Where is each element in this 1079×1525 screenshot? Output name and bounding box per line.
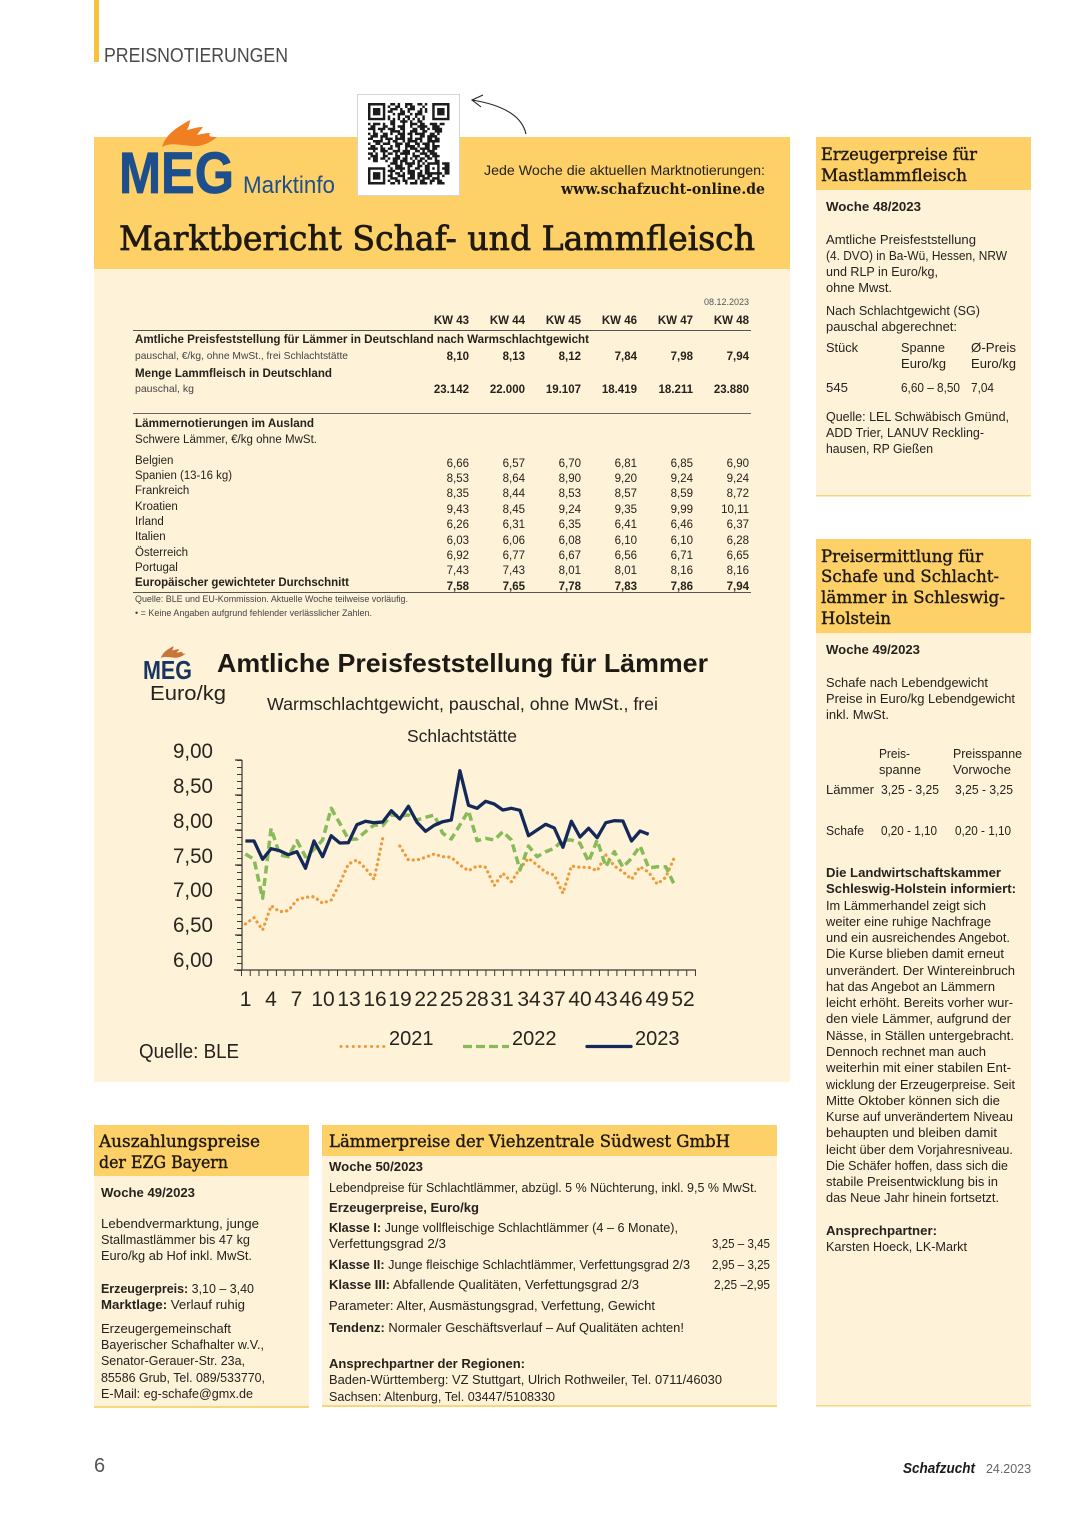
axes (234, 760, 697, 973)
table rows abroad: Kroatien (135, 501, 178, 513)
table rows abroad: 6,67 (559, 550, 581, 562)
table rows Germany: 8,12 (559, 351, 581, 363)
heading: Holstein (821, 609, 891, 629)
price table: 3,25 - 3,25 (881, 783, 939, 797)
table rows Germany: 18.211 (658, 384, 694, 396)
x axis labels: 49 (645, 988, 669, 1011)
table rows Germany: 23.142 (434, 384, 469, 396)
table header weeks: KW 46 (602, 315, 637, 327)
table rows abroad: 7,86 (671, 581, 693, 593)
table rows abroad (135, 418, 750, 593)
table rows abroad: 6,26 (447, 519, 469, 531)
x axis labels: 46 (619, 988, 643, 1011)
x axis labels: 40 (568, 988, 592, 1011)
article text: Karsten Hoeck, LK-Markt (826, 1240, 967, 1254)
table rows abroad: 8,59 (671, 488, 693, 500)
article text: Kurse auf unverändertem Niveau (826, 1110, 1013, 1124)
table rows abroad: Frankreich (135, 485, 189, 497)
body text: pauschal abgerechnet: (826, 320, 957, 334)
body text: Woche 49/2023 (101, 1186, 195, 1200)
table source note: • = Keine Angaben aufgrund fehlender verlässlicher Zahlen. (135, 608, 372, 618)
chart: official lamb prices (139, 646, 708, 1063)
heading: Lämmerpreise der Viehzentrale Südwest GmbH (329, 1132, 730, 1152)
table rows abroad: 7,43 (447, 565, 469, 577)
body text: Woche 50/2023 (329, 1160, 423, 1174)
table rows abroad: 6,06 (503, 535, 525, 547)
table rows abroad: 9,24 (559, 504, 582, 516)
body text: Sachsen: Altenburg, Tel. 03447/5108330 (329, 1390, 555, 1404)
table rows abroad: 9,20 (615, 473, 637, 485)
table rows abroad: 6,66 (447, 458, 469, 470)
article text: den viele Lämmer, aufgrund der (826, 1012, 1011, 1026)
y axis labels: 8,00 (173, 809, 213, 833)
table rows Germany: Amtliche Preisfeststellung für Lämmer in Deutschland nach Warmschlachtgewicht (135, 334, 589, 346)
article text: behaupten und bleiben damit (826, 1126, 998, 1140)
table source note: Quelle: BLE und EU-Kommission. Aktuelle Woche teilweise vorläufig. (135, 594, 408, 604)
body text: 6,60 – 8,50 (901, 381, 960, 395)
table header weeks: KW 43 (434, 315, 469, 327)
body text: ADD Trier, LANUV Reckling- (826, 426, 984, 440)
table header weeks: KW 48 (714, 315, 750, 327)
article text: leicht erhöht. Bereits vorher wur- (826, 996, 1013, 1010)
body text: 7,04 (971, 381, 994, 395)
table rows abroad: 8,35 (447, 488, 469, 500)
table rows abroad: Italien (135, 531, 166, 543)
table rows abroad: 6,10 (671, 535, 693, 547)
table rows abroad: 6,92 (447, 550, 469, 562)
x axis labels: 52 (671, 988, 695, 1011)
table rows abroad: 7,43 (503, 565, 525, 577)
table rows abroad: 8,90 (559, 473, 581, 485)
body text: Spanne (901, 341, 945, 355)
section heading: Preisnotierungen: PREISNOTIERUNGEN (104, 45, 288, 67)
price table: Lämmer (826, 783, 874, 797)
table rows abroad: 10,11 (721, 504, 749, 516)
x axis labels: 43 (594, 988, 618, 1011)
price table: Schafe (826, 824, 864, 838)
table rows abroad: 8,16 (727, 565, 749, 577)
body text: 545 (826, 381, 848, 395)
panel: Lämmerpreise Viehzentrale Südwest (322, 1125, 777, 1407)
heading: der EZG Bayern (99, 1153, 228, 1173)
chart subtitle: Schlachtstätte (407, 726, 517, 746)
footer: magazine name and issue (903, 1460, 1031, 1477)
table rows Germany: 18.419 (602, 384, 637, 396)
table rows abroad: 9,24 (727, 473, 750, 485)
article text: und ein ausreichendes Angebot. (826, 931, 1010, 945)
legend: 2022 (512, 1028, 556, 1050)
legend: 2023 (635, 1028, 680, 1050)
x axis labels: 31 (490, 988, 514, 1011)
price table: Preise in Euro/kg Lebendgewicht (826, 692, 1016, 706)
body text: Parameter: Alter, Ausmästungsgrad, Verfettung, Gewicht (329, 1299, 656, 1313)
y axis unit: Euro/kg (150, 683, 226, 705)
x axis labels: 1 (240, 988, 251, 1011)
table rows abroad: Spanien (13-16 kg) (135, 470, 232, 482)
table rows Germany: pauschal, kg (135, 383, 194, 395)
article text: Im Lämmerhandel zeigt sich (826, 899, 986, 913)
body text: ohne Mwst. (826, 281, 892, 295)
table rows abroad: 7,65 (503, 581, 526, 593)
y axis labels: 6,00 (173, 948, 213, 972)
y axis labels (173, 739, 213, 972)
table rows Germany: 22.000 (490, 384, 525, 396)
y axis labels: 6,50 (173, 913, 213, 937)
heading: Erzeugerpreise für (821, 145, 978, 165)
article text: Ansprechpartner: (826, 1224, 937, 1238)
body text: Amtliche Preisfeststellung (826, 233, 976, 247)
table rows abroad: 8,45 (503, 504, 525, 516)
body text: Quelle: LEL Schwäbisch Gmünd, (826, 410, 1009, 424)
body text: hausen, RP Gießen (826, 442, 933, 456)
body text: Ansprechpartner der Regionen: (329, 1357, 525, 1371)
price table: 3,25 - 3,25 (955, 783, 1013, 797)
panel: Auszahlungspreise EZG Bayern (94, 1125, 309, 1408)
heading (821, 547, 1005, 629)
price table: 0,20 - 1,10 (881, 824, 937, 838)
body text: Euro/kg (901, 357, 946, 371)
heading: Schafe und Schlacht- (821, 567, 999, 587)
body text (101, 1186, 265, 1401)
table rows abroad: 9,35 (615, 504, 637, 516)
panel: market report (94, 94, 790, 1082)
table rows abroad: 6,70 (559, 458, 581, 470)
body text (329, 1160, 770, 1404)
body text: Erzeugerpreise, Euro/kg (329, 1201, 479, 1215)
table rows abroad: 8,01 (615, 565, 637, 577)
article text: stabile Preisentwicklung bis in (826, 1175, 998, 1189)
body text: und RLP in Euro/kg, (826, 265, 938, 279)
body text: Ø-Preis (971, 341, 1016, 355)
article text: Schleswig-Holstein informiert: (826, 882, 1016, 896)
table rows abroad: 8,64 (503, 473, 526, 485)
logo: MEG Marktinfo (119, 120, 335, 206)
chart title: Amtliche Preisfeststellung für Lämmer (217, 648, 708, 678)
table rows abroad: Europäischer gewichteter Durchschnitt (135, 577, 349, 589)
x axis labels: 25 (440, 988, 463, 1011)
table rows abroad: 9,99 (671, 504, 693, 516)
article text: Die Kurse blieben damit erneut (826, 947, 1005, 961)
table rows abroad: Portugal (135, 562, 178, 574)
body text: Stallmastlämmer bis 47 kg (101, 1233, 250, 1247)
article text: weiter eine ruhige Nachfrage (825, 915, 991, 929)
article text: leicht über dem Vorjahresniveau. (826, 1143, 1013, 1157)
heading (98, 1132, 260, 1173)
body text: Bayerischer Schafhalter w.V., (101, 1338, 264, 1352)
body text: Tendenz: Normaler Geschäftsverlauf – Auf Qualitäten achten! (329, 1321, 684, 1335)
body text: Baden-Württemberg: VZ Stuttgart, Ulrich Rothweiler, Tel. 0711/46030 (329, 1373, 722, 1387)
legend: 2021 (389, 1028, 434, 1050)
body text: 2,25 –2,95 (714, 1278, 770, 1292)
footer: magazine name and issue: 24.2023 (986, 1461, 1031, 1476)
x axis labels: 34 (517, 988, 541, 1011)
table rows abroad: 6,35 (559, 519, 581, 531)
heading: Mastlammfleisch (821, 166, 967, 186)
body text: E-Mail: eg-schafe@gmx.de (101, 1387, 253, 1401)
table: prices: 08.12.2023 (704, 297, 749, 307)
table rows abroad: 7,94 (727, 581, 750, 593)
x axis labels (240, 988, 695, 1011)
line 2022 (245, 808, 674, 898)
x axis labels: 4 (265, 988, 277, 1011)
article text: unverändert. Der Wintereinbruch (826, 964, 1015, 978)
table rows abroad: 8,53 (447, 473, 469, 485)
x axis labels: 10 (311, 988, 335, 1011)
table rows abroad: Österreich (135, 547, 188, 559)
table rows abroad: 6,65 (727, 550, 749, 562)
table rows abroad: 7,83 (615, 581, 637, 593)
price table: Schafe nach Lebendgewicht (826, 676, 989, 690)
price table (826, 643, 1022, 838)
table rows abroad: 8,44 (503, 488, 526, 500)
article text: wicklung der Erzeugerpreise. Seit (825, 1078, 1015, 1092)
article text: Nässe, in Ställen untergebracht. (826, 1029, 1014, 1043)
article text: das Neue Jahr hinein fortsetzt. (826, 1191, 999, 1205)
table rows Germany: 19.107 (546, 384, 581, 396)
table rows abroad: 7,78 (559, 581, 582, 593)
body text: Klasse III: Abfallende Qualitäten, Verfettungsgrad 2/3 (329, 1278, 639, 1292)
body text: Stück (826, 341, 859, 355)
table rows Germany: 23.880 (714, 384, 749, 396)
icon: small MEG logo: MEG (143, 655, 192, 685)
line 2021 (245, 838, 674, 930)
table header weeks: KW 45 (546, 315, 582, 327)
y axis labels: 8,50 (173, 774, 213, 798)
section heading: Preisnotierungen (94, 0, 288, 67)
table rows abroad: 6,77 (503, 550, 525, 562)
table rows abroad: 6,31 (503, 519, 525, 531)
y axis labels: 7,00 (173, 878, 213, 902)
table rows Germany: 8,10 (447, 351, 469, 363)
x axis labels: 37 (542, 988, 566, 1011)
table rows abroad: 8,72 (727, 488, 749, 500)
table rows Germany: 8,13 (503, 351, 525, 363)
text: weekly notice (484, 162, 765, 198)
table rows abroad: 6,57 (503, 458, 525, 470)
body text: 3,25 – 3,45 (712, 1237, 770, 1251)
chart subtitle: Warmschlachtgewicht, pauschal, ohne MwSt., frei (267, 694, 658, 714)
logo: MEG Marktinfo: Marktinfo (243, 172, 335, 199)
table rows Germany: Menge Lammfleisch in Deutschland (135, 368, 332, 380)
x axis labels: 16 (363, 988, 387, 1011)
table rows abroad: 6,37 (727, 519, 749, 531)
body text: 85586 Grub, Tel. 089/533770, (101, 1371, 265, 1385)
body text: Euro/kg (971, 357, 1016, 371)
table rows Germany (135, 334, 750, 396)
body text: Verfettungsgrad 2/3 (329, 1237, 446, 1251)
y axis labels: 9,00 (173, 739, 213, 763)
body text: Senator-Gerauer-Str. 23a, (101, 1354, 245, 1368)
table header weeks: KW 47 (658, 315, 693, 327)
body text: Erzeugergemeinschaft (101, 1322, 232, 1336)
body text: Klasse I: Junge vollfleischige Schlachtlämmer (4 – 6 Monate), (329, 1221, 678, 1235)
article text: Die Schäfer hoffen, dass sich die (826, 1159, 1008, 1173)
table rows abroad: 6,56 (615, 550, 637, 562)
price table: Preis- (879, 747, 910, 761)
table rows abroad: Schwere Lämmer, €/kg ohne MwSt. (135, 434, 317, 446)
table rows abroad: 6,10 (615, 535, 637, 547)
price table: inkl. MwSt. (826, 708, 889, 722)
table rows Germany: 7,98 (671, 351, 694, 363)
table rows abroad: Lämmernotierungen im Ausland (135, 418, 314, 430)
price table: spanne (879, 763, 921, 777)
x axis labels: 19 (388, 988, 412, 1011)
table rows abroad: 8,53 (559, 488, 581, 500)
panel: Preisermittlung Schleswig-Holstein (816, 539, 1031, 1406)
body text: (4. DVO) in Ba-Wü, Hessen, NRW (826, 249, 1007, 263)
text: weekly notice: www.schafzucht-online.de (560, 181, 765, 198)
body text: Euro/kg ab Hof inkl. MwSt. (101, 1249, 252, 1263)
table source note (135, 594, 408, 618)
table rows abroad: Irland (135, 516, 164, 528)
table rows abroad: 6,46 (671, 519, 693, 531)
text: weekly notice: Jede Woche die aktuellen Marktnotierungen: (484, 162, 765, 178)
source: Quelle: BLE (139, 1041, 239, 1063)
table rows abroad: 6,90 (727, 458, 749, 470)
body text: 2,95 – 3,25 (712, 1258, 770, 1272)
table rows abroad: 8,16 (671, 565, 693, 577)
body text: Erzeugerpreis: 3,10 – 3,40 (101, 1282, 254, 1296)
table rows abroad: 6,41 (615, 519, 637, 531)
heading (821, 145, 978, 186)
chart subtitle (267, 694, 658, 746)
price table: 0,20 - 1,10 (955, 824, 1011, 838)
article text: hat das Angebot an Lämmern (826, 980, 995, 994)
body text: Marktlage: Verlauf ruhig (101, 1298, 245, 1312)
x axis labels: 28 (465, 988, 489, 1011)
table rows abroad: 6,85 (671, 458, 693, 470)
table rows abroad: 6,08 (559, 535, 581, 547)
footer: magazine name and issue: Schafzucht (903, 1460, 976, 1477)
body text: Klasse II: Junge fleischige Schlachtlämmer, Verfettungsgrad 2/3 (329, 1258, 690, 1272)
table rows abroad: 9,24 (671, 473, 694, 485)
table rows Germany: pauschal, €/kg, ohne MwSt., frei Schlachtstätte (135, 350, 348, 362)
article text: weiterhin mit einer stabilen Ent- (825, 1061, 1011, 1075)
price table: Preisspanne (953, 747, 1022, 761)
table rows abroad: 6,71 (671, 550, 693, 562)
table header weeks: KW 44 (490, 315, 526, 327)
table rows abroad: 8,01 (559, 565, 581, 577)
price table: Vorwoche (953, 763, 1011, 777)
body text: Nach Schlachtgewicht (SG) (826, 304, 980, 318)
icon: small MEG logo (143, 646, 192, 685)
table rows abroad: 6,28 (727, 535, 749, 547)
title: Marktbericht Schaf- und Lammfleisch (119, 219, 755, 259)
table rows abroad: 6,81 (615, 458, 637, 470)
body text: Lebendvermarktung, junge (101, 1217, 259, 1231)
article text: Mitte Oktober können sich die (826, 1094, 1000, 1108)
price table: Woche 49/2023 (826, 643, 920, 657)
table header weeks (434, 315, 750, 327)
QR code (358, 94, 460, 196)
logo: MEG Marktinfo: MEG (119, 141, 234, 206)
x axis labels: 7 (291, 988, 302, 1011)
table: prices (133, 297, 751, 618)
body text: Lebendpreise für Schlachtlämmer, abzügl. 5 % Nüchterung, inkl. 9,5 % MwSt. (329, 1181, 757, 1195)
article text: Die Landwirtschaftskammer (826, 866, 1001, 880)
panel: Erzeugerpreise für Mastlammfleisch (816, 137, 1031, 496)
body text (826, 200, 1016, 456)
table rows abroad: 9,43 (447, 504, 469, 516)
table rows Germany: 7,94 (727, 351, 750, 363)
page number: 6 (94, 1455, 105, 1477)
line 2023 (245, 771, 649, 868)
heading: Preisermittlung für (821, 547, 984, 567)
y axis labels: 7,50 (173, 844, 213, 868)
table rows abroad: Belgien (135, 455, 173, 467)
heading: lämmer in Schleswig- (821, 588, 1005, 608)
article text (825, 866, 1016, 1254)
arrow to QR code (472, 95, 526, 134)
table rows Germany: 7,84 (615, 351, 638, 363)
heading: Auszahlungspreise (98, 1132, 260, 1152)
x axis labels: 13 (337, 988, 361, 1011)
table rows abroad: 7,58 (447, 581, 470, 593)
legend (341, 1028, 680, 1050)
table rows abroad: 6,03 (447, 535, 469, 547)
x axis labels: 22 (414, 988, 438, 1011)
body text: Woche 48/2023 (826, 200, 921, 214)
article text: Dennoch rechnet man auch (826, 1045, 986, 1059)
table rows abroad: 8,57 (615, 488, 637, 500)
